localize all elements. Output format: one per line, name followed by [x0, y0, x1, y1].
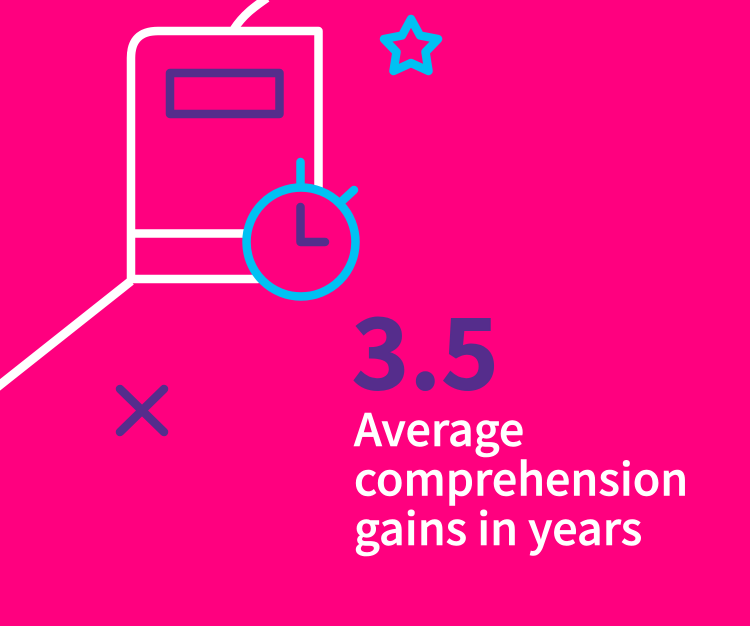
icon: cross [120, 389, 164, 432]
statistic: 3.5: 3.5 [352, 276, 499, 418]
book outline [131, 31, 318, 279]
stopwatch side button [342, 190, 354, 201]
caption line 2: comprehension [354, 444, 688, 508]
caption line 3: gains in years [354, 493, 642, 558]
icon: stopwatch [246, 162, 356, 296]
white connecting line: upper arc [234, 0, 267, 29]
stopwatch face [246, 188, 356, 296]
stopwatch hands [300, 207, 325, 242]
book label [170, 73, 280, 114]
stopwatch crown [296, 162, 305, 186]
icon: book [131, 31, 318, 279]
icon: star [384, 19, 438, 71]
caption: average comprehension gains in years [354, 394, 688, 558]
white connecting line: lower diagonal [0, 281, 131, 388]
caption line 1: Average [354, 394, 524, 459]
